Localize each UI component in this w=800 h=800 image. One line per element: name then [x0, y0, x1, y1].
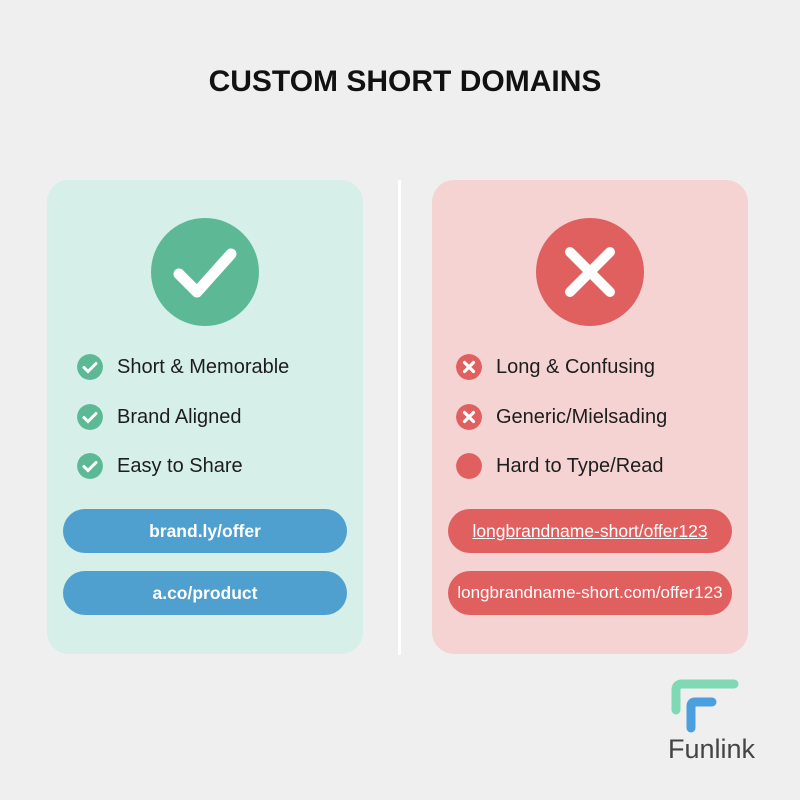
item: short: [77, 354, 289, 380]
pill: a.co: [63, 571, 347, 615]
icon: big check: [151, 218, 259, 326]
divider: [398, 180, 401, 655]
item: generic: [456, 404, 667, 430]
pill: long 1: longbrandname-short/offer123: [472, 520, 708, 540]
item: long: Long & Confusing: [496, 356, 655, 378]
pill: brand.ly: [63, 509, 347, 553]
item: hard: Hard to Type/Read: [496, 454, 664, 476]
item: hard: [456, 453, 664, 479]
item: long: [456, 354, 655, 380]
pill: long 1: [448, 509, 732, 553]
item: brand: Brand Aligned: [117, 406, 242, 428]
logo text: Funlink: [668, 734, 755, 764]
item: share: [77, 453, 243, 479]
panel: good: [47, 180, 363, 654]
item: generic: Generic/Mielsading: [496, 406, 667, 428]
item: share: Easy to Share: [117, 454, 243, 476]
pill: long 2: longbrandname-short.com/offer123: [457, 583, 723, 602]
pill: a.co: a.co/product: [152, 582, 258, 602]
item: short: Short & Memorable: [117, 356, 289, 378]
title: CUSTOM SHORT DOMAINS: [209, 65, 601, 98]
panel: bad: [432, 180, 748, 654]
item: brand: [77, 404, 242, 430]
logo: [668, 680, 755, 764]
icon: F mark: [672, 680, 738, 732]
pill: long 2: [448, 571, 732, 615]
icon: big x: [536, 218, 644, 326]
pill: brand.ly: brand.ly/offer: [149, 520, 261, 540]
